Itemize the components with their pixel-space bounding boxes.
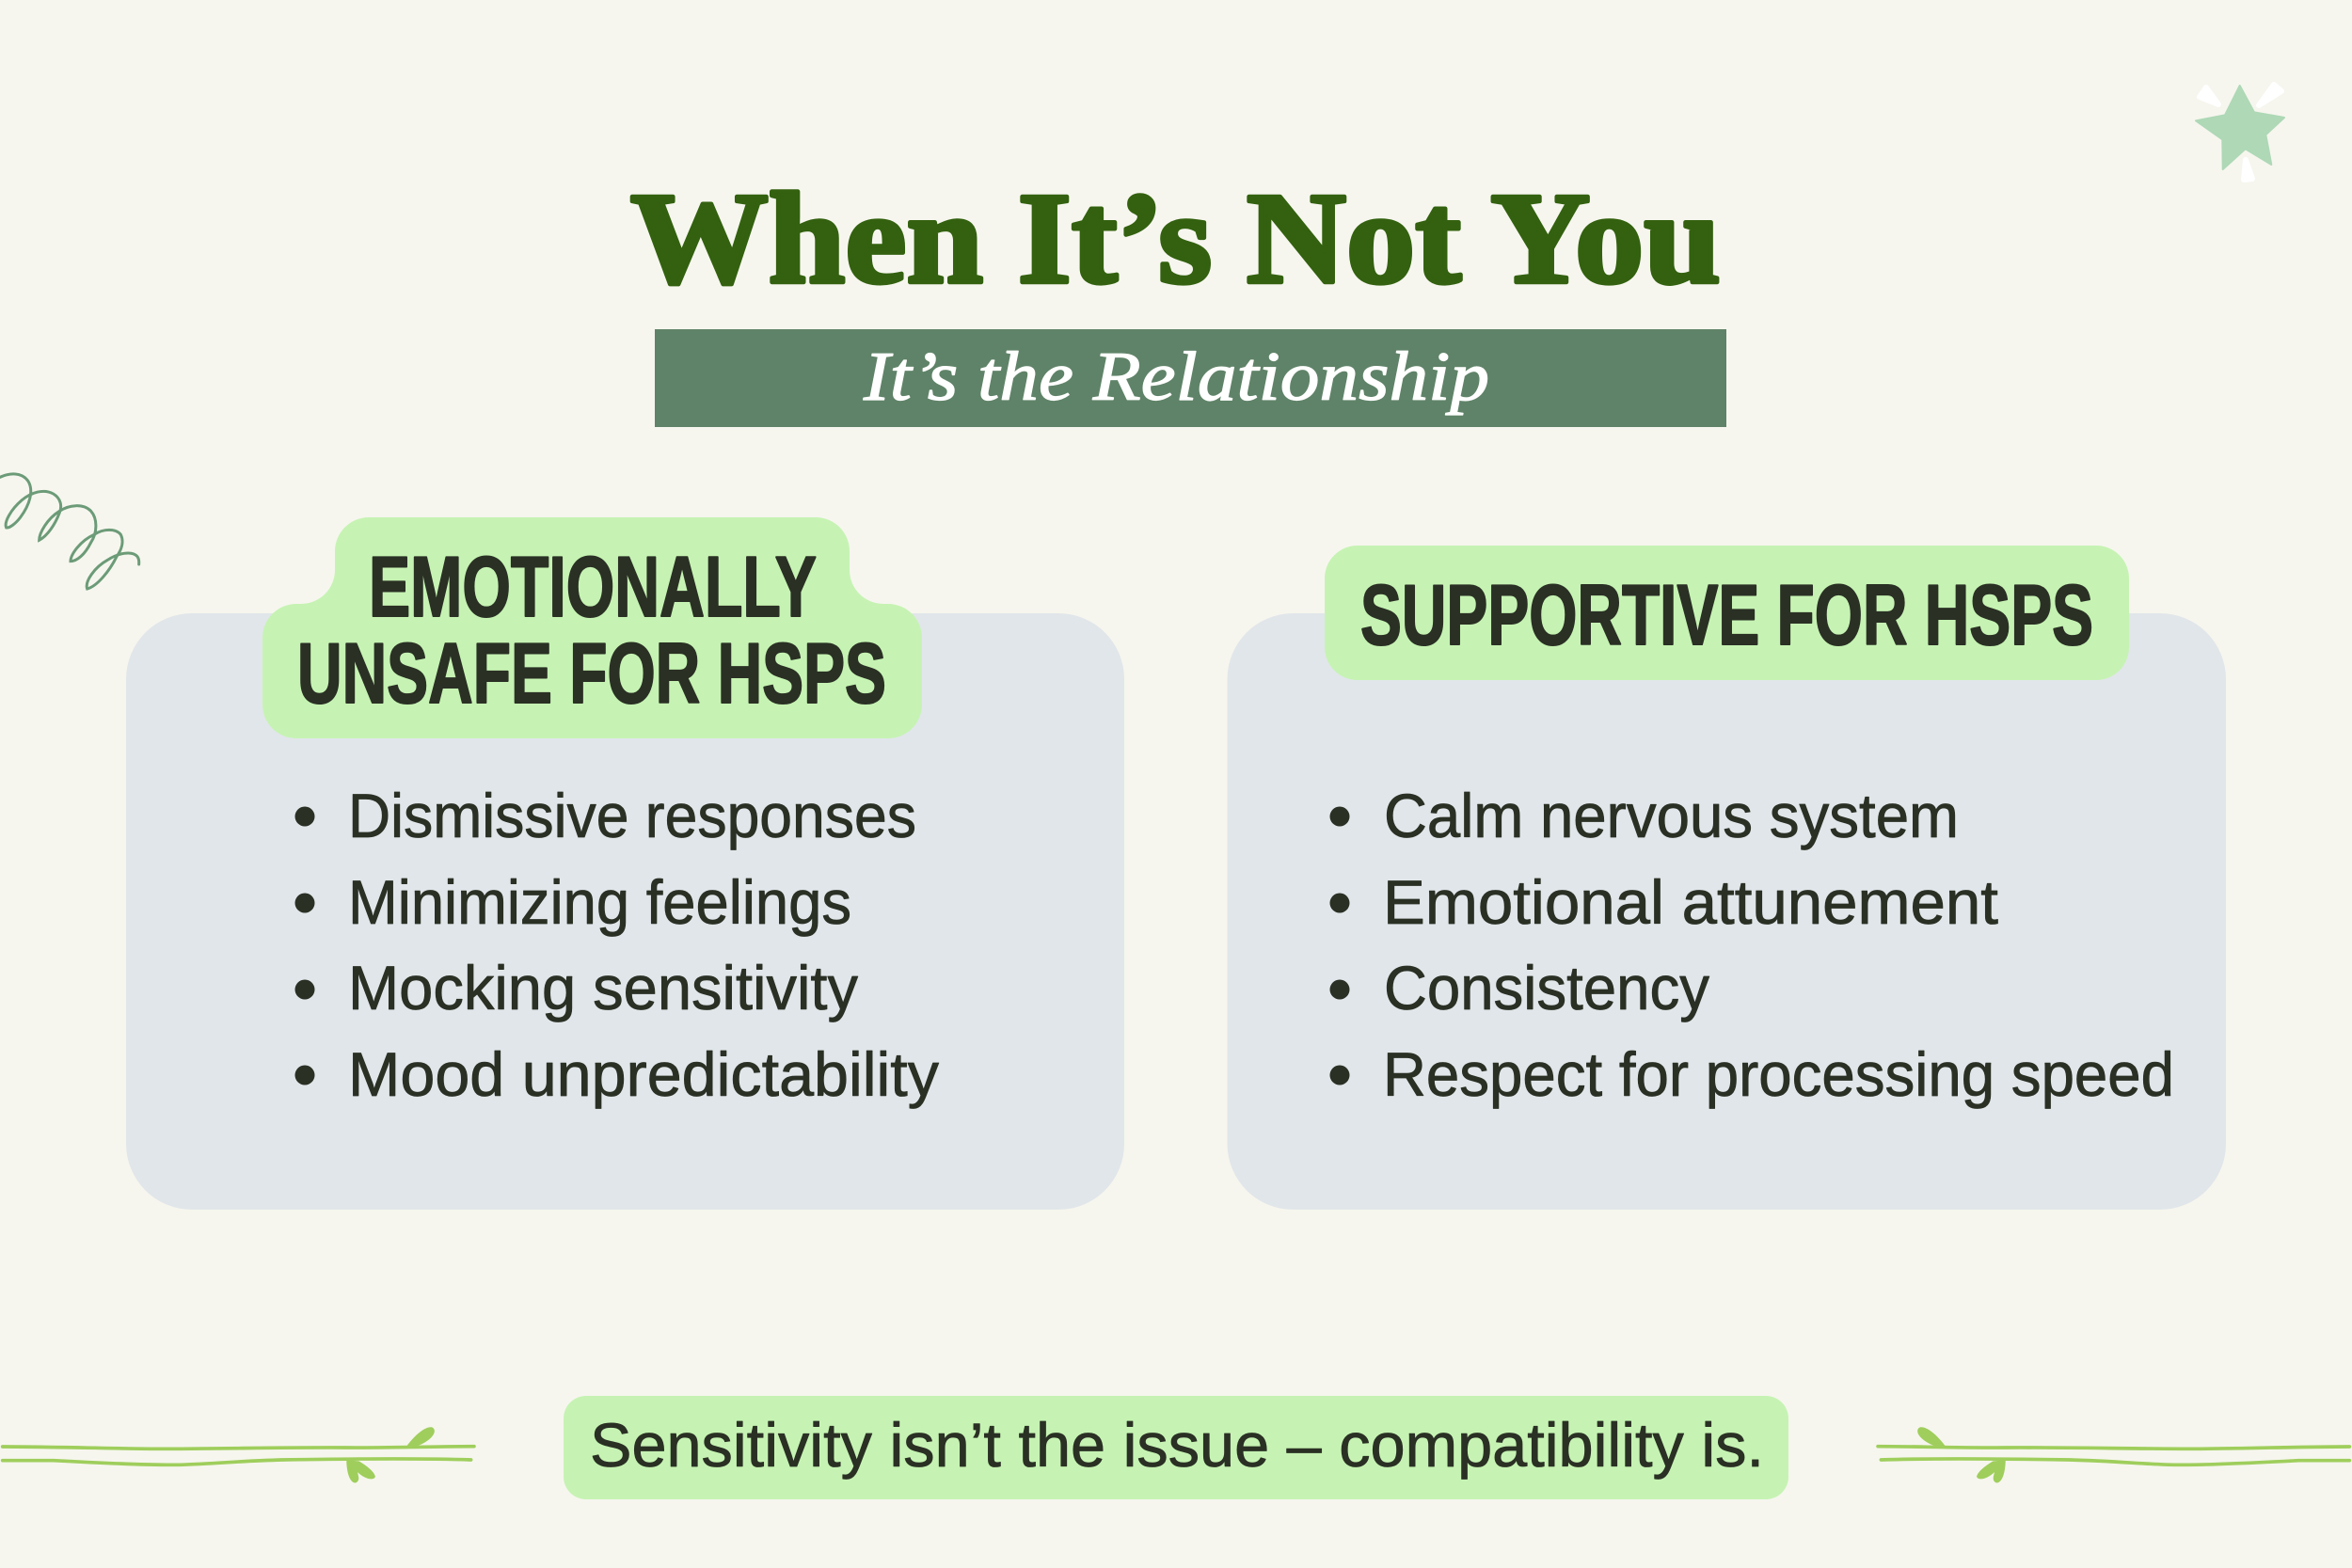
bullet list: Respect for processing speed	[1383, 1039, 2174, 1109]
panel background	[1227, 613, 2226, 1210]
panel: emotionally unsafe	[126, 517, 1124, 1210]
bullet list	[1330, 781, 2174, 1109]
left vine decoration	[3, 1427, 474, 1482]
bullet list: Dismissive responses	[348, 781, 916, 850]
heading badge: EMOTIONALLY	[369, 540, 817, 635]
heading badge	[1325, 546, 2129, 680]
heading badge	[262, 517, 922, 738]
bullet list: Calm nervous system	[1384, 781, 1959, 850]
bullet list: Consistency	[1384, 953, 1709, 1022]
right vine decoration	[1878, 1427, 2349, 1482]
bullet list: Mood unpredictability	[348, 1039, 939, 1109]
callout: closing statement: Sensitivity isn’t the issue – compatibility is.	[590, 1410, 1764, 1480]
icon: spring squiggle	[0, 474, 139, 589]
callout: closing statement	[564, 1396, 1788, 1499]
bullet list	[295, 781, 939, 1109]
panel: supportive	[1227, 546, 2226, 1210]
bullet list: Emotional attunement	[1383, 867, 1998, 937]
subtitle banner	[655, 329, 1726, 427]
panel background	[126, 613, 1124, 1210]
heading badge: UNSAFE FOR HSPS	[297, 626, 886, 721]
heading badge: SUPPORTIVE FOR HSPS	[1360, 568, 2093, 663]
subtitle banner: It’s the Relationship	[863, 339, 1489, 416]
icon: star with sparkles	[2196, 85, 2284, 180]
bullet list: Minimizing feelings	[348, 867, 851, 937]
bullet list: Mocking sensitivity	[348, 953, 858, 1022]
title: When It’s Not You	[630, 166, 1721, 311]
